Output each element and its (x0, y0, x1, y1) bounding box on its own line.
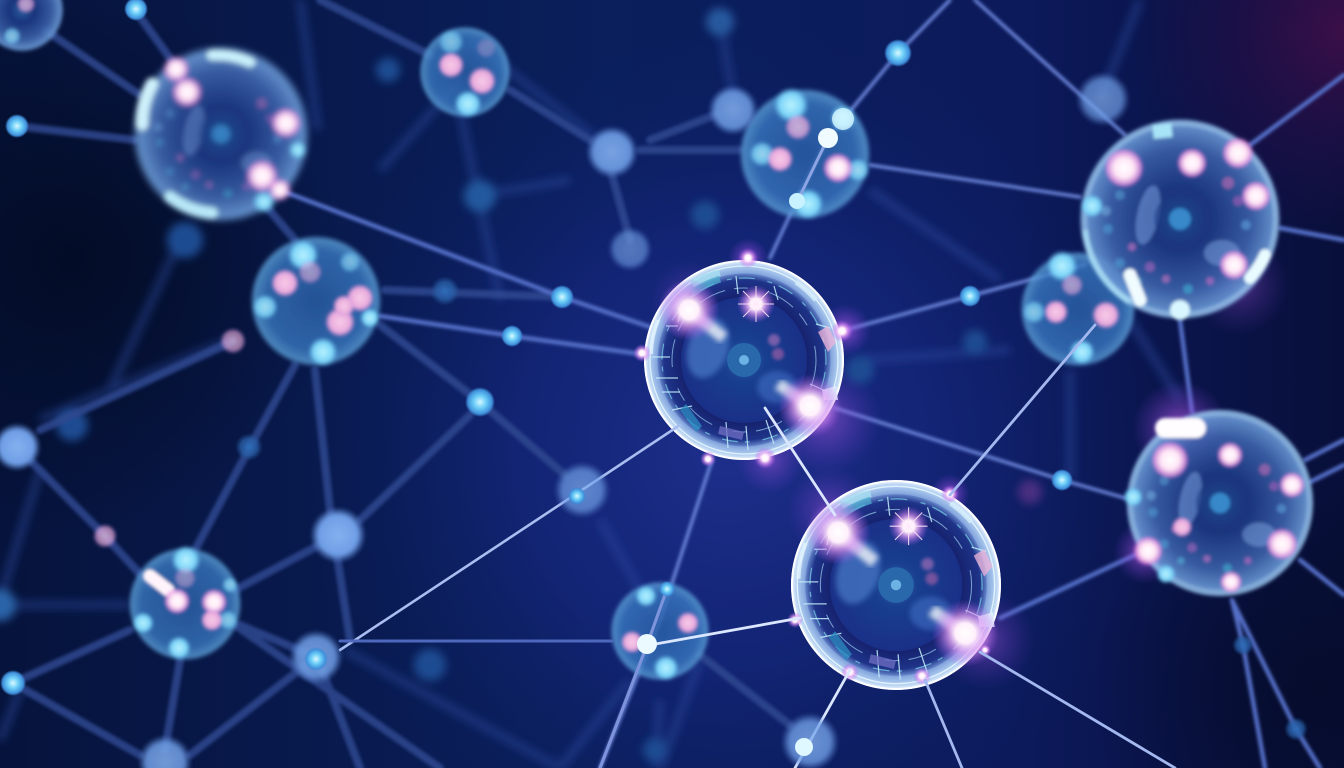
large pale nodes (0, 72, 1130, 768)
sphere: lower centre (610, 581, 710, 681)
sphere: top centre (739, 87, 871, 220)
sphere: lower right glass (1113, 380, 1314, 597)
sphere: left middle (250, 235, 382, 367)
sharp connection lines (340, 138, 1175, 768)
small pink nodes (93, 328, 246, 548)
sphere: far left top (0, 0, 64, 52)
sphere: behind right (1020, 250, 1136, 367)
sphere: lower central glass (787, 480, 1001, 690)
dim blue nodes (235, 276, 1308, 741)
halos around central spheres (650, 238, 1035, 690)
small cyan nodes (0, 0, 1073, 756)
sphere: lower left (128, 545, 242, 661)
sphere: upper right glass (1079, 118, 1290, 335)
sphere: top small (419, 26, 511, 118)
sphere: top left large (132, 45, 310, 223)
sphere: central glass (633, 248, 853, 469)
